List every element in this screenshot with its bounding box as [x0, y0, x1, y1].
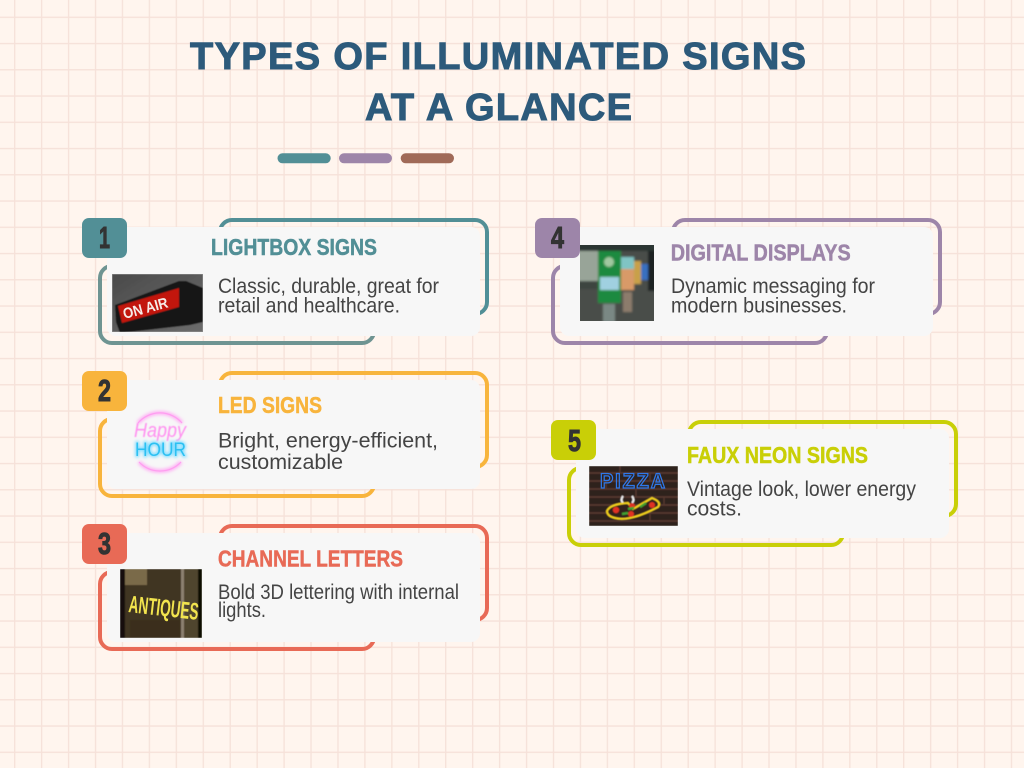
icon: happy hour neon — [134, 413, 187, 471]
icon: happy hour neon: HOUR — [135, 440, 186, 461]
number badge 5 — [551, 420, 596, 460]
photo: pizza neon sign — [589, 466, 678, 526]
photo: antiques sign — [120, 569, 202, 638]
heading: DIGITAL DISPLAYS — [671, 240, 851, 266]
photo: on air sign — [112, 274, 203, 333]
description: customizable — [218, 451, 343, 474]
title: TYPES OF ILLUMINATED SIGNS — [190, 36, 806, 78]
description: retail and healthcare. — [218, 295, 400, 318]
number badge 1: 1 — [99, 220, 110, 255]
heading: LED SIGNS — [218, 392, 322, 418]
icon: happy hour neon: Happy — [134, 420, 187, 442]
photo: antiques sign: ANTIQUES — [127, 591, 200, 626]
description: Dynamic messaging for — [671, 275, 875, 298]
photo: digital display columns — [578, 243, 656, 323]
number badge 3: 3 — [98, 526, 111, 561]
panel: led signs — [82, 371, 487, 496]
description: lights. — [218, 599, 266, 622]
panel: channel letters — [82, 524, 487, 649]
heading: FAUX NEON SIGNS — [687, 442, 868, 468]
description — [687, 478, 916, 521]
photo: pizza neon sign: PIZZA — [600, 470, 667, 493]
title: AT A GLANCE — [365, 87, 632, 129]
panel: lightbox signs — [82, 218, 487, 343]
description: Classic, durable, great for — [218, 275, 439, 298]
heading: CHANNEL LETTERS — [218, 546, 403, 572]
panel: faux neon signs — [551, 420, 956, 545]
number badge 2 — [82, 371, 127, 411]
description: modern businesses. — [671, 295, 847, 318]
number badge 4: 4 — [551, 220, 565, 255]
description: Vintage look, lower energy — [687, 478, 916, 501]
number badge 3 — [82, 524, 127, 564]
description — [671, 275, 875, 318]
colour accent bars — [278, 153, 454, 163]
description — [218, 581, 459, 622]
photo: on air sign: ON AIR — [121, 295, 170, 323]
description: Bold 3D lettering with internal — [218, 581, 459, 604]
number badge 4 — [535, 218, 580, 258]
number badge 2: 2 — [98, 373, 111, 408]
description: costs. — [687, 498, 742, 521]
panel: digital displays — [535, 218, 940, 343]
description — [218, 275, 439, 318]
icon: happy hour neon: HOUR — [135, 440, 186, 461]
title — [190, 36, 806, 129]
description — [218, 430, 438, 474]
heading: LIGHTBOX SIGNS — [211, 234, 377, 260]
description: Bright, energy-efficient, — [218, 430, 438, 453]
number badge 5: 5 — [568, 423, 581, 458]
number badge 1 — [82, 218, 127, 258]
